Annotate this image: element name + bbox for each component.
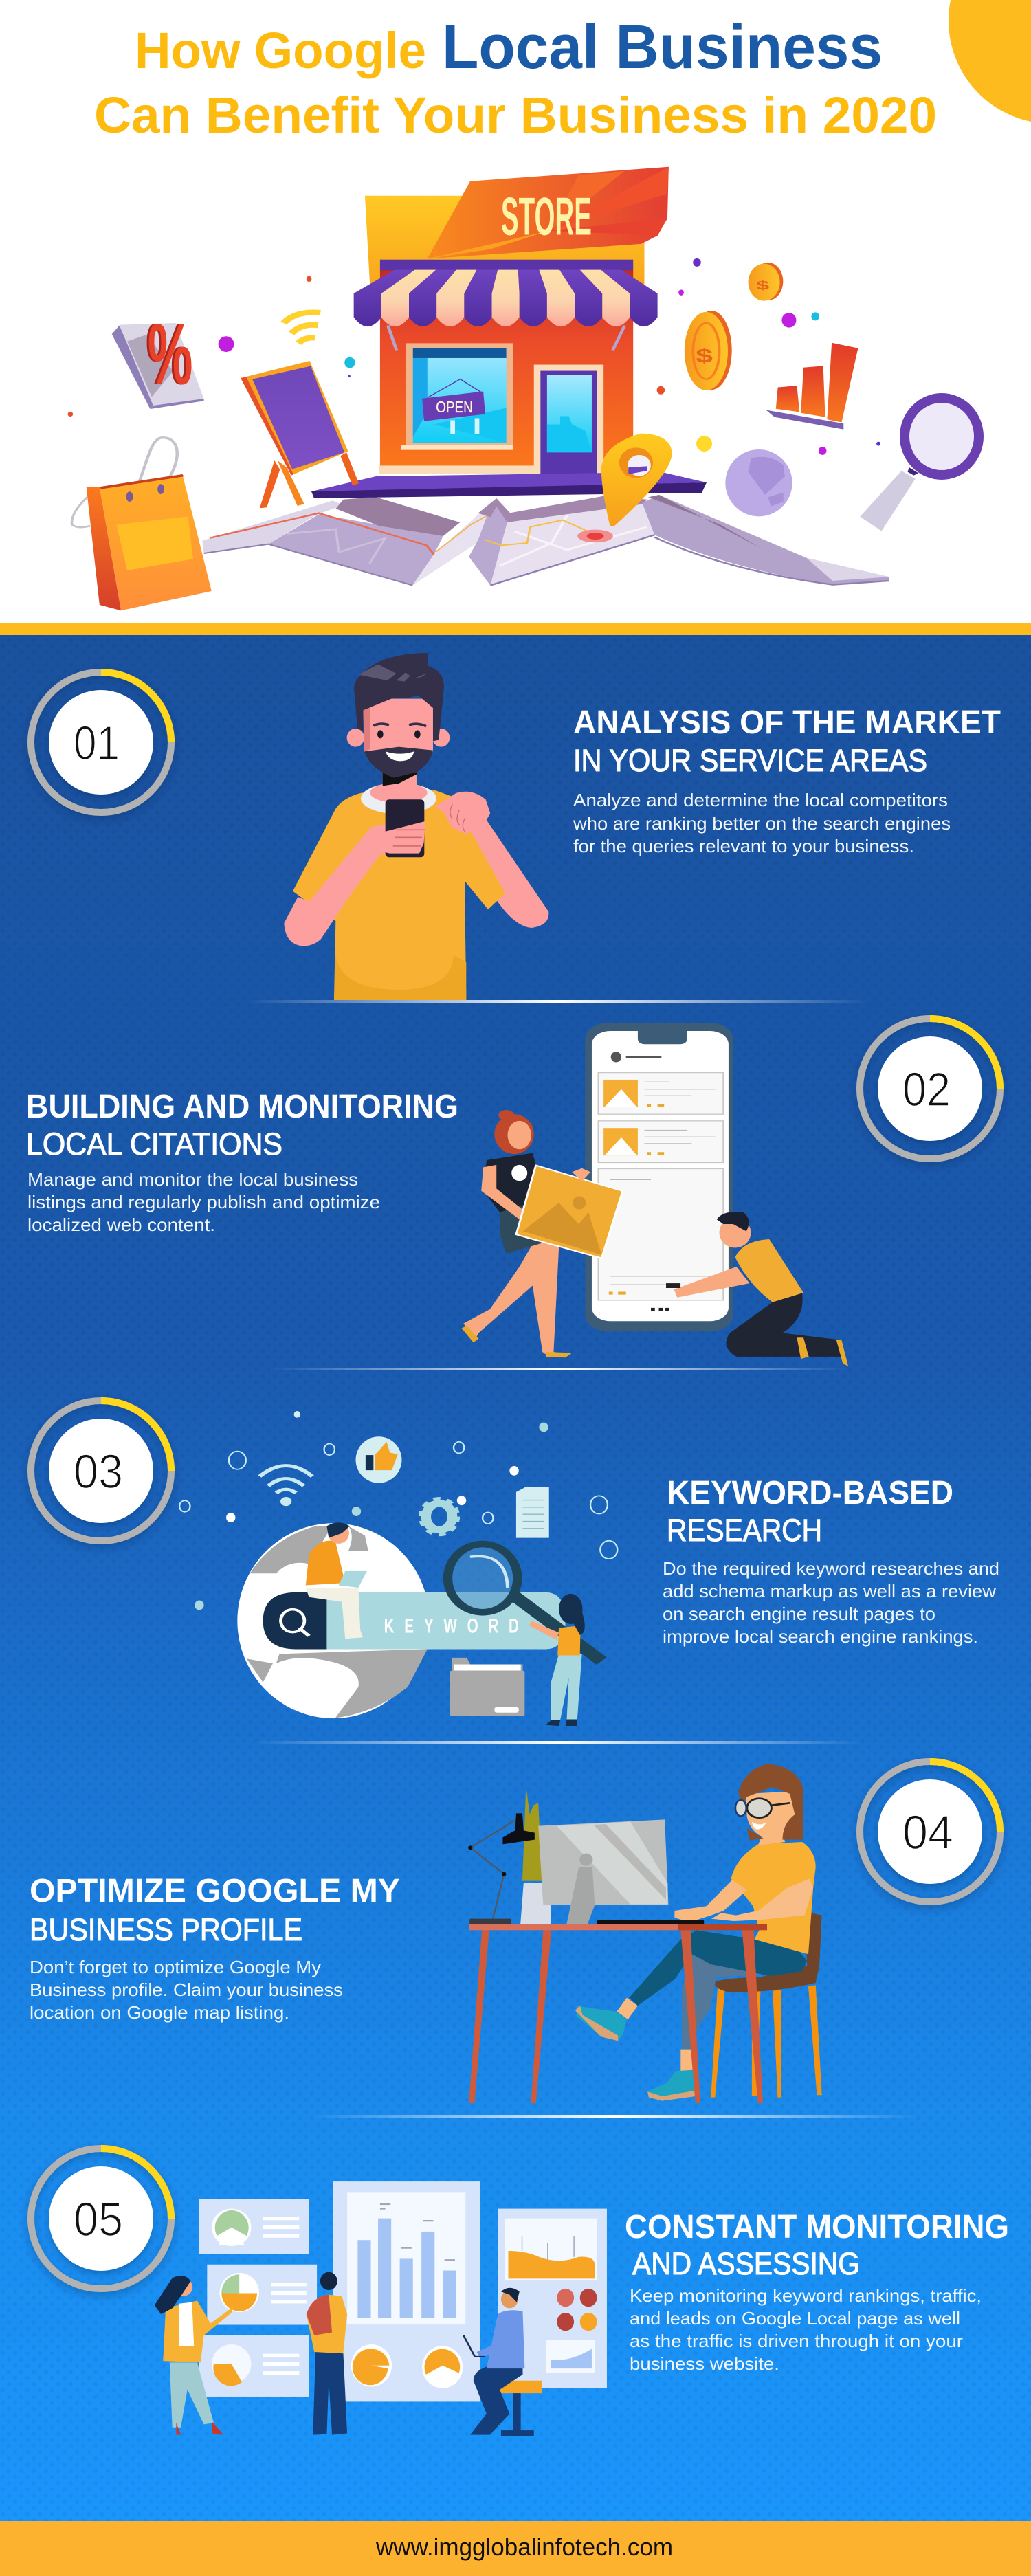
icon: bar chart — [766, 343, 858, 430]
icon: man seated with laptop — [463, 2288, 542, 2436]
icon: like bubble — [356, 1436, 401, 1483]
icon: desk lamp — [468, 1813, 535, 1924]
number badge 03: 03 — [74, 1445, 123, 1498]
illustration: analytics dashboards with people — [155, 2181, 607, 2436]
icon: large bar chart panel — [333, 2181, 480, 2401]
number badge 02 — [860, 1019, 1000, 1159]
icon: folded map right part — [469, 495, 889, 586]
text block 05: as the traffic is driven through it on your — [630, 2331, 963, 2351]
text block 03: Do the required keyword researches and — [663, 1558, 999, 1579]
text block 02: localized web content. — [27, 1214, 215, 1235]
yellow band — [0, 623, 1031, 635]
icon: coin large: $ — [696, 345, 713, 367]
icon: coin large — [685, 311, 732, 390]
icon: chair — [711, 1912, 822, 2098]
number badge 05 — [31, 2148, 171, 2289]
icon: roof bar — [380, 260, 633, 270]
icon: location pin — [601, 434, 672, 526]
text block 02: Manage and monitor the local business — [27, 1169, 358, 1190]
icon: door — [534, 365, 603, 474]
number badge 03 — [31, 1401, 171, 1541]
heading 04: BUSINESS PROFILE — [30, 1912, 302, 1947]
icon: coin small — [749, 263, 783, 301]
title: Can Benefit Your Business in 2020 — [94, 87, 937, 144]
text block 04: Business profile. Claim your business — [30, 1979, 343, 2000]
heading 01 — [573, 704, 1001, 778]
icon: woman working — [575, 1764, 816, 2101]
icon: smartphone — [585, 1023, 733, 1331]
heading 03: KEYWORD-BASED — [667, 1475, 953, 1511]
heading 04 — [30, 1873, 400, 1947]
text block 05: and leads on Google Local page as well — [630, 2308, 960, 2329]
number badge 05: 05 — [74, 2192, 123, 2246]
yellow corner circle — [949, 0, 1031, 124]
text block 05: Keep monitoring keyword rankings, traffic, — [630, 2285, 982, 2306]
text block 01: Analyze and determine the local competitors — [573, 790, 948, 810]
icon: awning — [354, 270, 658, 351]
text block 02: listings and regularly publish and optimize — [27, 1192, 380, 1212]
icon: folder — [450, 1658, 524, 1716]
illustration: keyword search — [179, 1411, 617, 1726]
icon: a-frame board — [241, 361, 359, 508]
text block 04 — [30, 1957, 343, 2023]
text block 01: for the queries relevant to your business. — [573, 836, 914, 856]
heading 05 — [625, 2209, 1009, 2281]
text block 03 — [663, 1558, 999, 1647]
heading 01: IN YOUR SERVICE AREAS — [573, 743, 927, 778]
section 03 — [31, 1401, 999, 1726]
icon: woman presenting — [155, 2276, 234, 2435]
icon: search bar — [263, 1592, 566, 1650]
heading 05: AND ASSESSING — [632, 2246, 860, 2281]
icon: globe — [725, 449, 792, 516]
text block 02 — [27, 1169, 380, 1235]
text block 01 — [573, 790, 951, 856]
heading 04: OPTIMIZE GOOGLE MY — [30, 1873, 400, 1909]
heading 01: ANALYSIS OF THE MARKET — [573, 704, 1001, 741]
heading 05: CONSTANT MONITORING — [625, 2209, 1009, 2245]
section 05 — [31, 2148, 1009, 2436]
text block 05 — [630, 2285, 982, 2374]
icon: desk — [469, 1924, 767, 2103]
section 02 — [26, 1019, 1000, 1366]
icon: woman — [529, 1594, 585, 1726]
icon: store sign: STORE — [501, 186, 592, 246]
icon: wifi — [260, 1466, 312, 1504]
icon: magnifier handle — [860, 467, 918, 531]
icon: building body — [380, 270, 633, 474]
icon: dashboard card mixed pie — [207, 2265, 317, 2325]
icon: right panel with area chart — [498, 2209, 607, 2388]
icon: platform — [311, 472, 707, 498]
number badge 04: 04 — [902, 1806, 953, 1859]
icon: shop back wall — [365, 196, 644, 313]
icon: shop base — [379, 465, 539, 474]
number badge 04 — [860, 1762, 1000, 1902]
text block 04: location on Google map listing. — [30, 2002, 289, 2023]
footer bar with website: www.imgglobalinfotech.com — [375, 2533, 673, 2561]
text block 03: on search engine result pages to — [663, 1603, 935, 1624]
heading 02 — [26, 1089, 458, 1162]
icon: decorative dots and rings — [179, 1411, 617, 1610]
icon: dashboard card green pie — [199, 2199, 309, 2254]
icon: man on laptop — [306, 1522, 367, 1639]
icon: wifi — [284, 312, 320, 343]
text block 05: business website. — [630, 2353, 779, 2374]
icon: shopping bag — [71, 438, 212, 610]
icon: magnifier lens — [905, 398, 979, 475]
text block 01: who are ranking better on the search engines — [573, 813, 951, 834]
white header background — [0, 0, 1031, 623]
text block 03: add schema markup as well as a review — [663, 1581, 996, 1601]
number badge 02: 02 — [902, 1063, 951, 1116]
illustration: man with phone — [284, 653, 548, 1000]
text block 03: improve local search engine rankings. — [663, 1626, 978, 1647]
icon: gear — [421, 1498, 458, 1535]
icon: percent card: % — [148, 306, 192, 402]
icon: decorative coloured dots — [68, 258, 880, 455]
icon: coin small: $ — [756, 278, 769, 292]
title — [94, 13, 937, 144]
heading 02: LOCAL CITATIONS — [26, 1126, 282, 1162]
number badge 01: 01 — [74, 716, 120, 770]
icon: woman with picture — [462, 1110, 623, 1357]
icon: globe — [237, 1523, 430, 1718]
icon: man standing — [307, 2272, 347, 2435]
heading 02: BUILDING AND MONITORING — [26, 1089, 458, 1125]
illustration: phone with two people — [462, 1023, 848, 1366]
icon: man kneeling — [666, 1212, 848, 1366]
background dot texture — [0, 635, 1031, 2521]
icon: shop window with open sign — [401, 343, 513, 450]
icon: dashboard card yellow slice — [199, 2335, 309, 2397]
heading 03: RESEARCH — [667, 1513, 822, 1548]
icon: document — [516, 1487, 549, 1538]
illustration: woman at desk — [468, 1764, 822, 2103]
icon: folded map left part — [202, 497, 505, 586]
icon: shop window with open sign: OPEN — [436, 399, 473, 416]
title: Local Business — [442, 13, 883, 82]
illustration: store and local business map — [68, 167, 979, 610]
number badge 01 — [31, 672, 171, 812]
icon: monitor — [538, 1819, 704, 1924]
icon: percent card — [112, 306, 204, 409]
footer bar with website — [0, 2521, 1031, 2576]
text block 04: Don’t forget to optimize Google My — [30, 1957, 321, 1977]
icon: magnifier — [447, 1544, 601, 1661]
section 04 — [30, 1762, 1000, 2103]
heading 03 — [667, 1475, 953, 1548]
section 01 — [31, 653, 1001, 1000]
icon: percent card: % — [146, 306, 190, 402]
blue gradient background — [0, 635, 1031, 2521]
icon: store sign — [428, 167, 669, 258]
icon: plant in vase — [520, 1786, 551, 1924]
title: How Google — [135, 22, 426, 79]
icon: search bar: KEYWORD — [384, 1615, 519, 1637]
